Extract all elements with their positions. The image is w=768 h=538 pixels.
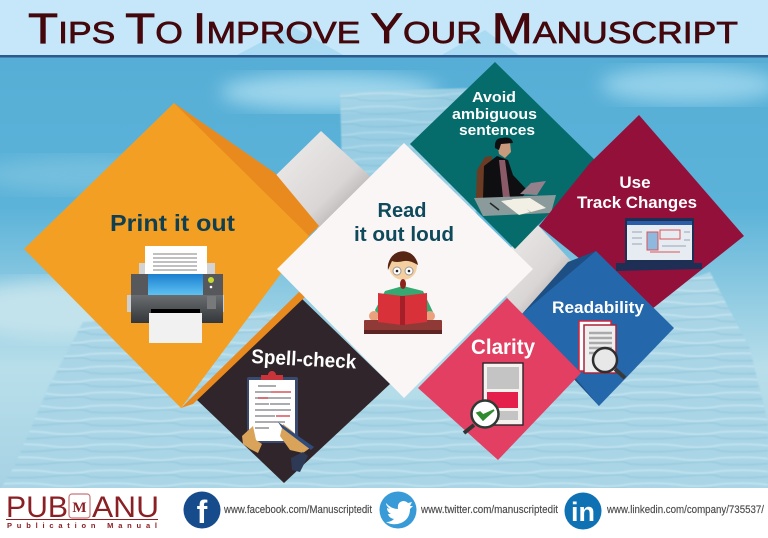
label: print it out: Print it out bbox=[110, 210, 235, 236]
label: read it out loud: Read bbox=[378, 200, 426, 222]
panel: readability bbox=[522, 251, 674, 406]
label: avoid ambiguous sentences: Avoid bbox=[472, 89, 516, 106]
header band bbox=[0, 0, 768, 58]
link: twitter: www.twitter.com/manuscriptedit bbox=[420, 504, 558, 516]
logo: pubmanu bbox=[6, 491, 159, 530]
label: use track changes: Track Changes bbox=[577, 193, 697, 212]
label: use track changes bbox=[577, 173, 697, 212]
icon: laptop with tracked document bbox=[616, 218, 702, 271]
link: facebook: www.facebook.com/Manuscriptedit bbox=[223, 504, 372, 516]
label: avoid ambiguous sentences: sentences bbox=[459, 122, 535, 139]
label: clarity: Clarity bbox=[471, 336, 535, 359]
label: readability: Readability bbox=[552, 298, 645, 317]
icon: printer bbox=[127, 246, 224, 343]
tile: grey decorative diamond right bbox=[490, 222, 573, 318]
logo: pubmanu: ANU bbox=[92, 491, 159, 524]
panel: clarity bbox=[418, 298, 581, 460]
icon: man at desk bbox=[474, 138, 556, 216]
icon: twitter bbox=[380, 492, 416, 528]
icon: clipboard with hands bbox=[242, 371, 314, 472]
label: avoid ambiguous sentences bbox=[452, 89, 537, 139]
icon: child reading a book bbox=[364, 251, 442, 334]
icon: facebook: f bbox=[197, 494, 208, 530]
panel: read it out loud bbox=[277, 143, 533, 398]
panel: use track changes bbox=[539, 115, 744, 313]
icon: facebook bbox=[184, 492, 220, 530]
panel: print it out bbox=[24, 103, 319, 408]
label: read it out loud bbox=[354, 200, 454, 246]
footer band bbox=[0, 488, 768, 538]
title: TIPS TO IMPROVE YOUR MANUSCRIPT bbox=[28, 5, 738, 53]
panel: spell-check bbox=[196, 296, 390, 483]
label: read it out loud: it out loud bbox=[354, 224, 454, 246]
label: spell-check: Spell-check bbox=[251, 346, 358, 374]
tile: grey decorative diamond left bbox=[272, 131, 372, 232]
label: use track changes: Use bbox=[619, 173, 651, 192]
icon: linkedin bbox=[564, 492, 602, 530]
icon: documents with magnifier bbox=[579, 321, 625, 378]
logo: pubmanu: PUB bbox=[6, 491, 68, 524]
label: avoid ambiguous sentences: ambiguous bbox=[452, 106, 537, 123]
logo: pubmanu: M bbox=[72, 500, 87, 516]
panel: avoid ambiguous sentences bbox=[410, 62, 598, 249]
logo: pubmanu: Publication Manual bbox=[7, 521, 157, 530]
icon: linkedin: in bbox=[571, 497, 595, 527]
icon: document with check magnifier bbox=[464, 363, 523, 433]
